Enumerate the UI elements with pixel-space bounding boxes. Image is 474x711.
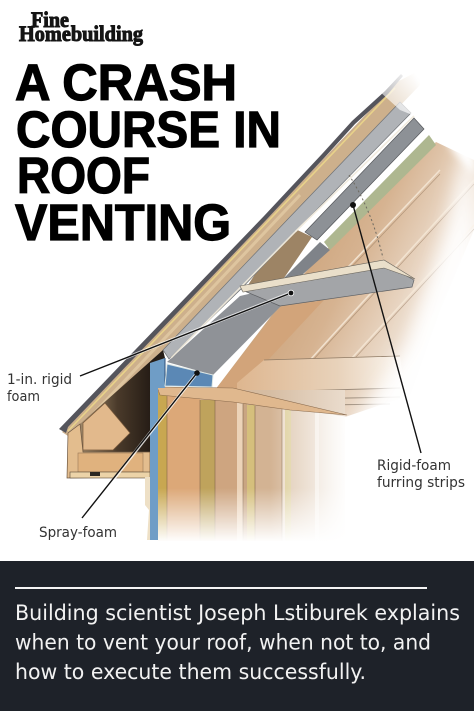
label: 1-in. rigid foam: 1-in. rigid [7,372,72,388]
shingles [59,74,403,433]
eave fascia and soffit [67,424,150,540]
white fade at upper right corner [412,60,474,175]
footer panel [0,561,474,711]
blue exterior foam [150,358,213,540]
footer rule [15,587,427,589]
footer text: when to vent your roof, when not to, and [15,630,431,654]
logo: Fine Homebuilding: Homebuilding [19,21,143,46]
wall fade to white [150,488,350,542]
wall studs [167,395,200,541]
brown cavity behind furring [248,225,312,285]
title: VENTING [15,194,231,251]
dashed hidden furring outline [349,175,383,258]
title: ROOF [17,147,150,204]
page background [0,0,474,561]
wall insulation strips [158,392,167,541]
logo: Fine Homebuilding [19,7,143,46]
white fade at right of ceiling [350,140,474,432]
label: rigid-foam furring strips: furring strips [377,475,465,491]
dark rigid furring strip [305,118,424,240]
logo: Fine Homebuilding: Fine [31,7,69,32]
blue spray foam [165,364,213,387]
label: rigid-foam furring strips: Rigid-foam [377,458,451,474]
diagonal rafter [215,300,324,390]
footer text: how to execute them successfully. [15,660,366,684]
rigid foam lower wide panel [167,282,300,375]
rigid foam light strip [163,102,411,359]
title: COURSE IN [16,101,281,158]
dark eave cavity [80,350,165,453]
footer text: Building scientist Joseph Lstiburek explains [15,601,460,625]
leader line: spray-foam [82,370,200,518]
leader line: furring strips [350,202,421,453]
lower dark strip [284,242,330,284]
footer text [15,601,460,684]
title [15,54,281,251]
green strip [324,135,436,250]
ceiling and rafter bay wood [215,142,474,417]
label: spray-foam: Spray-foam [39,525,117,541]
title: A CRASH [15,54,237,111]
ceiling joists [262,388,400,405]
illustration: roof section [59,50,474,545]
roof sheathing wood [62,70,420,436]
rafter tail block [83,403,130,450]
leader line: 1-in. rigid foam [80,290,294,376]
horizontal ceiling beam [237,356,404,392]
label: 1-in. rigid foam: foam [7,389,40,405]
wall framing [158,390,345,541]
top plate [157,387,347,415]
white fade at upper end of roof [345,50,474,150]
horizontal rigid-foam furring strip [240,260,415,306]
yellow sheathing edge [68,88,395,431]
